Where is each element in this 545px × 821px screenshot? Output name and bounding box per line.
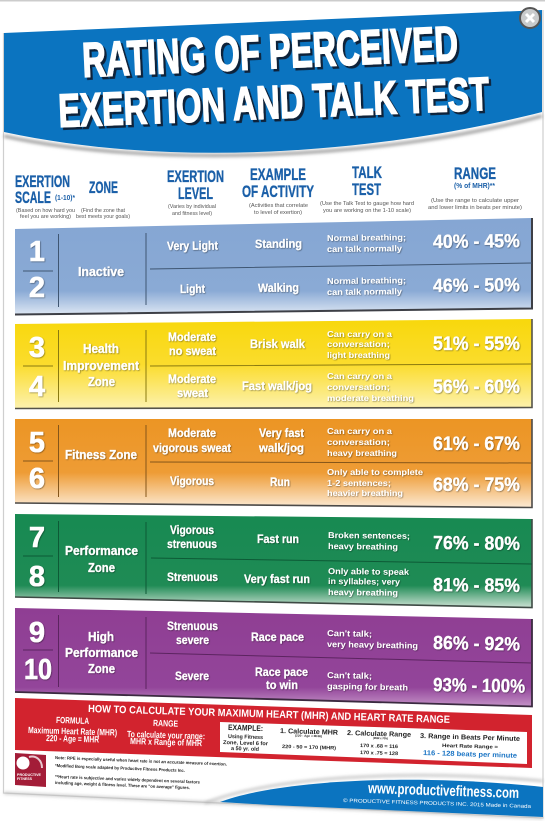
activities: Very fast run bbox=[244, 572, 310, 586]
heart rate ranges bbox=[433, 434, 520, 496]
exertion scale numbers: 7 bbox=[29, 522, 45, 554]
talk test text: Can't talk; bbox=[327, 670, 372, 681]
range block: To calculate your range: bbox=[127, 729, 205, 741]
heart rate ranges: 61% - 67% bbox=[433, 434, 520, 455]
zone name: High bbox=[88, 629, 114, 644]
talk test text: Only able to complete bbox=[327, 467, 423, 477]
exertion levels: Very Light bbox=[167, 238, 218, 253]
zone name: Zone bbox=[88, 560, 115, 575]
example box bbox=[220, 722, 527, 764]
step 2: 170 x .75 = 128 bbox=[360, 750, 398, 757]
step 3 bbox=[420, 733, 520, 760]
exertion scale numbers: 6 bbox=[29, 463, 45, 495]
heading: exertion scale: (1-10)* bbox=[55, 195, 75, 202]
panel: how to calculate bbox=[15, 698, 532, 768]
example intro: Zone, Level 6 for bbox=[223, 740, 269, 747]
talk test text: heavier breathing bbox=[327, 488, 403, 498]
talk test text bbox=[327, 232, 406, 297]
formula block: 220 - Age = MHR bbox=[46, 733, 100, 745]
zone name: Improvement bbox=[63, 358, 140, 373]
exertion scale numbers: 9 bbox=[29, 617, 45, 649]
heading: exertion scale: (Based on how hard you bbox=[16, 208, 75, 214]
exertion scale numbers: 2 bbox=[29, 272, 45, 304]
talk test text bbox=[328, 530, 410, 598]
logo: Productive Fitness bbox=[15, 753, 46, 787]
heart rate ranges: 76% - 80% bbox=[433, 533, 520, 555]
talk test text: conversation; bbox=[327, 339, 390, 349]
heart rate ranges: 51% - 55% bbox=[433, 334, 520, 355]
heading: range: (Use the range to calculate upper bbox=[431, 198, 519, 204]
exertion levels: Vigorous bbox=[170, 523, 214, 537]
heading: range: RANGE bbox=[454, 164, 496, 183]
step 3: Heart Rate Range = bbox=[442, 743, 498, 751]
activities: Race pace bbox=[255, 665, 308, 679]
talk test text: gasping for breath bbox=[327, 681, 408, 692]
talk test text: heavy breathing bbox=[328, 541, 398, 552]
talk test text: 1-2 sentences; bbox=[327, 478, 391, 488]
exertion levels bbox=[167, 238, 218, 296]
activities: Race pace bbox=[251, 630, 304, 644]
logo: Productive Fitness: PRODUCTIVE bbox=[17, 773, 42, 777]
exertion levels: no sweat bbox=[169, 344, 216, 358]
formula block: Maximum Heart Rate (MHR) bbox=[28, 725, 117, 738]
copyright: © PRODUCTIVE FITNESS PRODUCTS INC. 2015 Made in Canada bbox=[343, 797, 531, 810]
talk test text: Broken sentences; bbox=[328, 530, 410, 541]
panel: inactive band bbox=[15, 218, 532, 315]
talk test text: can talk normally bbox=[327, 286, 402, 297]
formula block bbox=[28, 715, 117, 745]
zone name: Performance bbox=[65, 645, 138, 660]
step 2: (MHR x 70%) bbox=[373, 736, 388, 740]
step 1: 220 - 50 = 170 (MHR) bbox=[282, 744, 336, 752]
activities: Standing bbox=[255, 237, 302, 251]
heading: example of activity: EXAMPLE bbox=[250, 165, 306, 184]
zone name: Inactive bbox=[78, 264, 124, 279]
banner shape bbox=[4, 10, 542, 153]
footnotes bbox=[55, 755, 227, 790]
talk test text: Normal breathing; bbox=[327, 232, 406, 243]
heading: exertion scale: feel you are working) bbox=[20, 214, 71, 220]
heart rate ranges: 40% - 45% bbox=[433, 231, 520, 253]
zone name: Fitness Zone bbox=[65, 447, 137, 462]
zone name bbox=[63, 341, 140, 389]
heart rate ranges: 86% - 92% bbox=[433, 633, 520, 656]
band background bbox=[15, 218, 532, 315]
exertion levels: Moderate bbox=[168, 330, 216, 344]
heart rate ranges bbox=[433, 533, 520, 597]
icon: close button bbox=[520, 8, 540, 28]
heading: range: and lower limits in beats per minute) bbox=[428, 205, 522, 211]
heading: exertion level: LEVEL bbox=[178, 184, 213, 203]
range block: MHR x Range of MHR bbox=[130, 736, 203, 748]
activities bbox=[258, 426, 304, 489]
logo: Productive Fitness: FITNESS bbox=[17, 777, 33, 781]
activities: Fast walk/jog bbox=[242, 379, 312, 393]
exertion scale numbers bbox=[24, 617, 52, 686]
heading: talk test: you are working on the 1-10 scale) bbox=[323, 208, 411, 214]
range block bbox=[127, 718, 205, 748]
exertion levels: Vigorous bbox=[170, 474, 214, 488]
zone name: Performance bbox=[65, 543, 138, 558]
exertion levels: strenuous bbox=[167, 537, 217, 551]
talk test text: Can carry on a bbox=[327, 329, 392, 339]
talk test text bbox=[327, 426, 423, 498]
exertion scale numbers: 5 bbox=[29, 427, 45, 459]
talk test text: moderate breathing bbox=[327, 393, 414, 403]
exertion scale numbers: 8 bbox=[29, 561, 45, 593]
talk test text: conversation; bbox=[327, 382, 390, 392]
heading: talk test: (Use the Talk Test to gauge how hard bbox=[320, 201, 414, 207]
example intro: EXAMPLE: bbox=[228, 723, 263, 733]
talk test text: in syllables; very bbox=[328, 576, 400, 587]
heading: exertion level: and fitness level) bbox=[172, 211, 212, 217]
footer banner bbox=[205, 775, 543, 817]
activities bbox=[251, 630, 308, 692]
heading: range bbox=[428, 164, 522, 211]
talk test text: light breathing bbox=[327, 350, 390, 360]
exertion scale numbers bbox=[29, 332, 45, 403]
heart rate ranges: 46% - 50% bbox=[433, 275, 520, 297]
talk test text: Only able to speak bbox=[328, 566, 409, 577]
talk test text: can talk normally bbox=[327, 243, 402, 254]
example intro: a 50 yr. old bbox=[231, 746, 259, 753]
exertion levels: vigorous sweat bbox=[153, 441, 231, 455]
activities bbox=[242, 337, 312, 393]
zone name bbox=[65, 629, 138, 676]
heading: zone: best meets your goals) bbox=[76, 214, 130, 220]
red background bbox=[15, 698, 532, 768]
panel: performance zone band bbox=[15, 514, 532, 608]
exertion levels: Strenuous bbox=[167, 570, 218, 584]
footer shape bbox=[220, 780, 543, 817]
heading: talk test bbox=[320, 163, 414, 214]
exertion levels: Strenuous bbox=[167, 619, 218, 633]
panel: fitness zone band bbox=[15, 419, 532, 508]
exertion scale numbers: 10 bbox=[24, 654, 52, 686]
zone name: Zone bbox=[88, 661, 115, 676]
heart rate ranges: 81% - 85% bbox=[433, 575, 520, 597]
heading: zone bbox=[76, 178, 130, 220]
talk test text: Can carry on a bbox=[327, 371, 392, 381]
step 1: 1. Calculate MHR bbox=[280, 728, 338, 737]
exertion scale numbers bbox=[29, 236, 45, 304]
heart rate ranges bbox=[433, 231, 520, 297]
talk test text: Can't talk; bbox=[327, 628, 372, 639]
exertion scale numbers: 1 bbox=[29, 236, 45, 268]
heart rate ranges: 68% - 75% bbox=[433, 475, 520, 496]
exertion levels: severe bbox=[176, 633, 209, 647]
heading: example of activity: OF ACTIVITY bbox=[242, 182, 314, 201]
exertion levels: Severe bbox=[175, 669, 209, 683]
panel: health improvement band bbox=[15, 319, 532, 409]
heart rate ranges: 56% - 60% bbox=[433, 377, 520, 398]
range block: RANGE bbox=[153, 718, 178, 729]
panel: high performance zone band bbox=[15, 608, 532, 707]
panel: header banner bbox=[4, 10, 542, 155]
formula block: FORMULA bbox=[56, 715, 90, 726]
heading: exertion level: (Varies by individual bbox=[168, 204, 216, 210]
footnotes: Note: RPE is especially useful when heart rate is not an accurate measure of exertion. bbox=[55, 755, 227, 767]
talk test text bbox=[327, 628, 418, 692]
exertion scale numbers bbox=[29, 427, 45, 495]
activities bbox=[255, 237, 302, 295]
footnotes: **Heart rate is subjective and varies widely dependent on several factors bbox=[55, 774, 201, 785]
heading: exertion level: EXERTION bbox=[167, 167, 224, 186]
activities: Run bbox=[270, 475, 290, 489]
column headings bbox=[15, 163, 522, 220]
band background bbox=[15, 608, 532, 707]
talk test text: conversation; bbox=[327, 437, 390, 447]
activities: Brisk walk bbox=[250, 337, 305, 351]
zone name bbox=[65, 543, 138, 575]
step 3: 116 - 128 beats per minute bbox=[423, 750, 517, 760]
heading: exertion scale: EXERTION bbox=[15, 172, 70, 191]
heading: example of activity bbox=[242, 165, 314, 216]
band background bbox=[15, 419, 532, 508]
example intro bbox=[223, 723, 269, 753]
step 1 bbox=[280, 728, 338, 752]
activities: walk/jog bbox=[258, 441, 304, 455]
exertion levels: sweat bbox=[177, 386, 208, 400]
talk test text: very heavy breathing bbox=[327, 639, 418, 651]
exertion scale numbers: 4 bbox=[29, 371, 45, 403]
heading: zone: (Find the zone that bbox=[81, 208, 125, 214]
exertion levels: Moderate bbox=[168, 372, 216, 386]
exertion scale numbers bbox=[29, 522, 45, 593]
band background bbox=[15, 514, 532, 608]
exertion levels bbox=[168, 330, 216, 400]
exertion levels: Moderate bbox=[168, 426, 216, 440]
talk test text: Normal breathing; bbox=[327, 275, 406, 286]
step 3: 3. Range in Beats Per Minute bbox=[420, 733, 520, 743]
activities: Very fast bbox=[259, 426, 304, 440]
heading: example of activity: (Activities that correlate bbox=[249, 203, 308, 209]
zone name: Zone bbox=[88, 374, 115, 389]
zone name: Health bbox=[83, 341, 119, 356]
exertion levels bbox=[167, 619, 218, 683]
activities bbox=[244, 532, 310, 586]
step 2 bbox=[347, 730, 411, 757]
heading: example of activity: to level of exertion) bbox=[254, 210, 302, 216]
activities: Fast run bbox=[257, 532, 299, 546]
footnotes: *Modified Borg scale adapted by Productive Fitness Products Inc. bbox=[55, 763, 185, 773]
panel title: HOW TO CALCULATE YOUR MAXIMUM HEART (MHR) AND HEART RATE RANGE bbox=[88, 703, 450, 726]
exertion levels bbox=[153, 426, 231, 488]
talk test text: Can carry on a bbox=[327, 426, 392, 436]
heading: talk test: TALK bbox=[352, 163, 382, 182]
heading: zone: ZONE bbox=[89, 178, 118, 197]
heading: exertion level bbox=[167, 167, 224, 217]
footnotes: including age, weight & fitness level. These are "on average" figures. bbox=[55, 780, 190, 790]
heading: range: (% of MHR)** bbox=[454, 183, 495, 190]
activities: to win bbox=[266, 678, 298, 692]
exertion levels: Light bbox=[180, 282, 205, 296]
step 2: 2. Calculate Range bbox=[347, 730, 411, 739]
talk test text bbox=[327, 329, 414, 403]
heart rate ranges: 93% - 100% bbox=[433, 675, 525, 698]
example intro: Using Fitness bbox=[228, 734, 263, 741]
heading: exertion scale: SCALE bbox=[15, 188, 51, 207]
heart rate ranges bbox=[433, 633, 525, 698]
heading: talk test: TEST bbox=[352, 180, 381, 199]
heart rate ranges bbox=[433, 334, 520, 398]
talk test text: heavy breathing bbox=[328, 587, 398, 598]
title bbox=[57, 17, 490, 137]
step 1: (220 - Age = MHR) bbox=[295, 734, 322, 738]
talk test text: heavy breathing bbox=[327, 448, 397, 458]
activities: Walking bbox=[258, 281, 299, 295]
band background bbox=[15, 319, 532, 409]
step 2: 170 x .68 = 116 bbox=[360, 743, 398, 750]
exertion scale numbers: 3 bbox=[29, 332, 45, 364]
exertion levels bbox=[167, 523, 218, 584]
heading: exertion scale bbox=[15, 172, 75, 220]
